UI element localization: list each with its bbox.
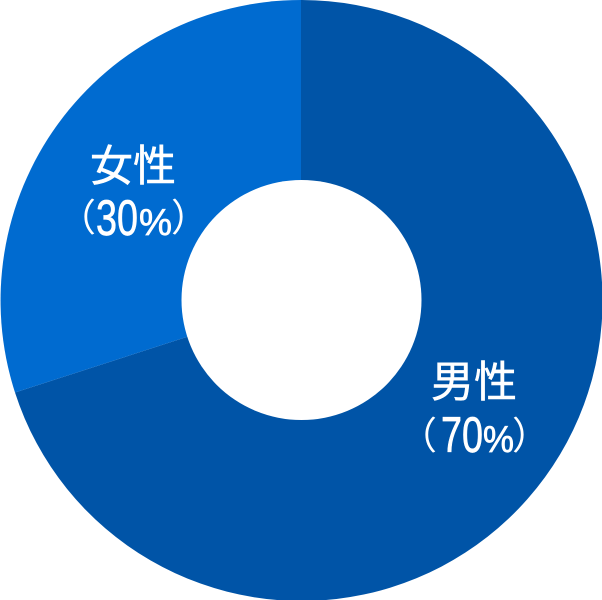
label: female 30%: 女 xyxy=(90,132,133,194)
label: male 70%: （ xyxy=(399,405,437,460)
label: male 70%: 性 xyxy=(474,348,517,410)
donut hole xyxy=(182,180,422,420)
segment: female 30% xyxy=(1,0,301,392)
label: female 30%: 30 xyxy=(96,190,138,246)
label: male 70%: % xyxy=(483,419,514,460)
label: female 30% xyxy=(58,132,209,246)
label: male 70%: ） xyxy=(512,405,550,460)
label: female 30%: 性 xyxy=(133,132,176,194)
label: male 70%: 男 xyxy=(431,348,474,410)
label: male 70% xyxy=(399,348,550,463)
label: male 70%: 70 xyxy=(441,407,483,463)
label: female 30%: ） xyxy=(171,187,209,242)
label: female 30%: % xyxy=(139,202,172,243)
label: female 30%: （ xyxy=(58,187,96,242)
